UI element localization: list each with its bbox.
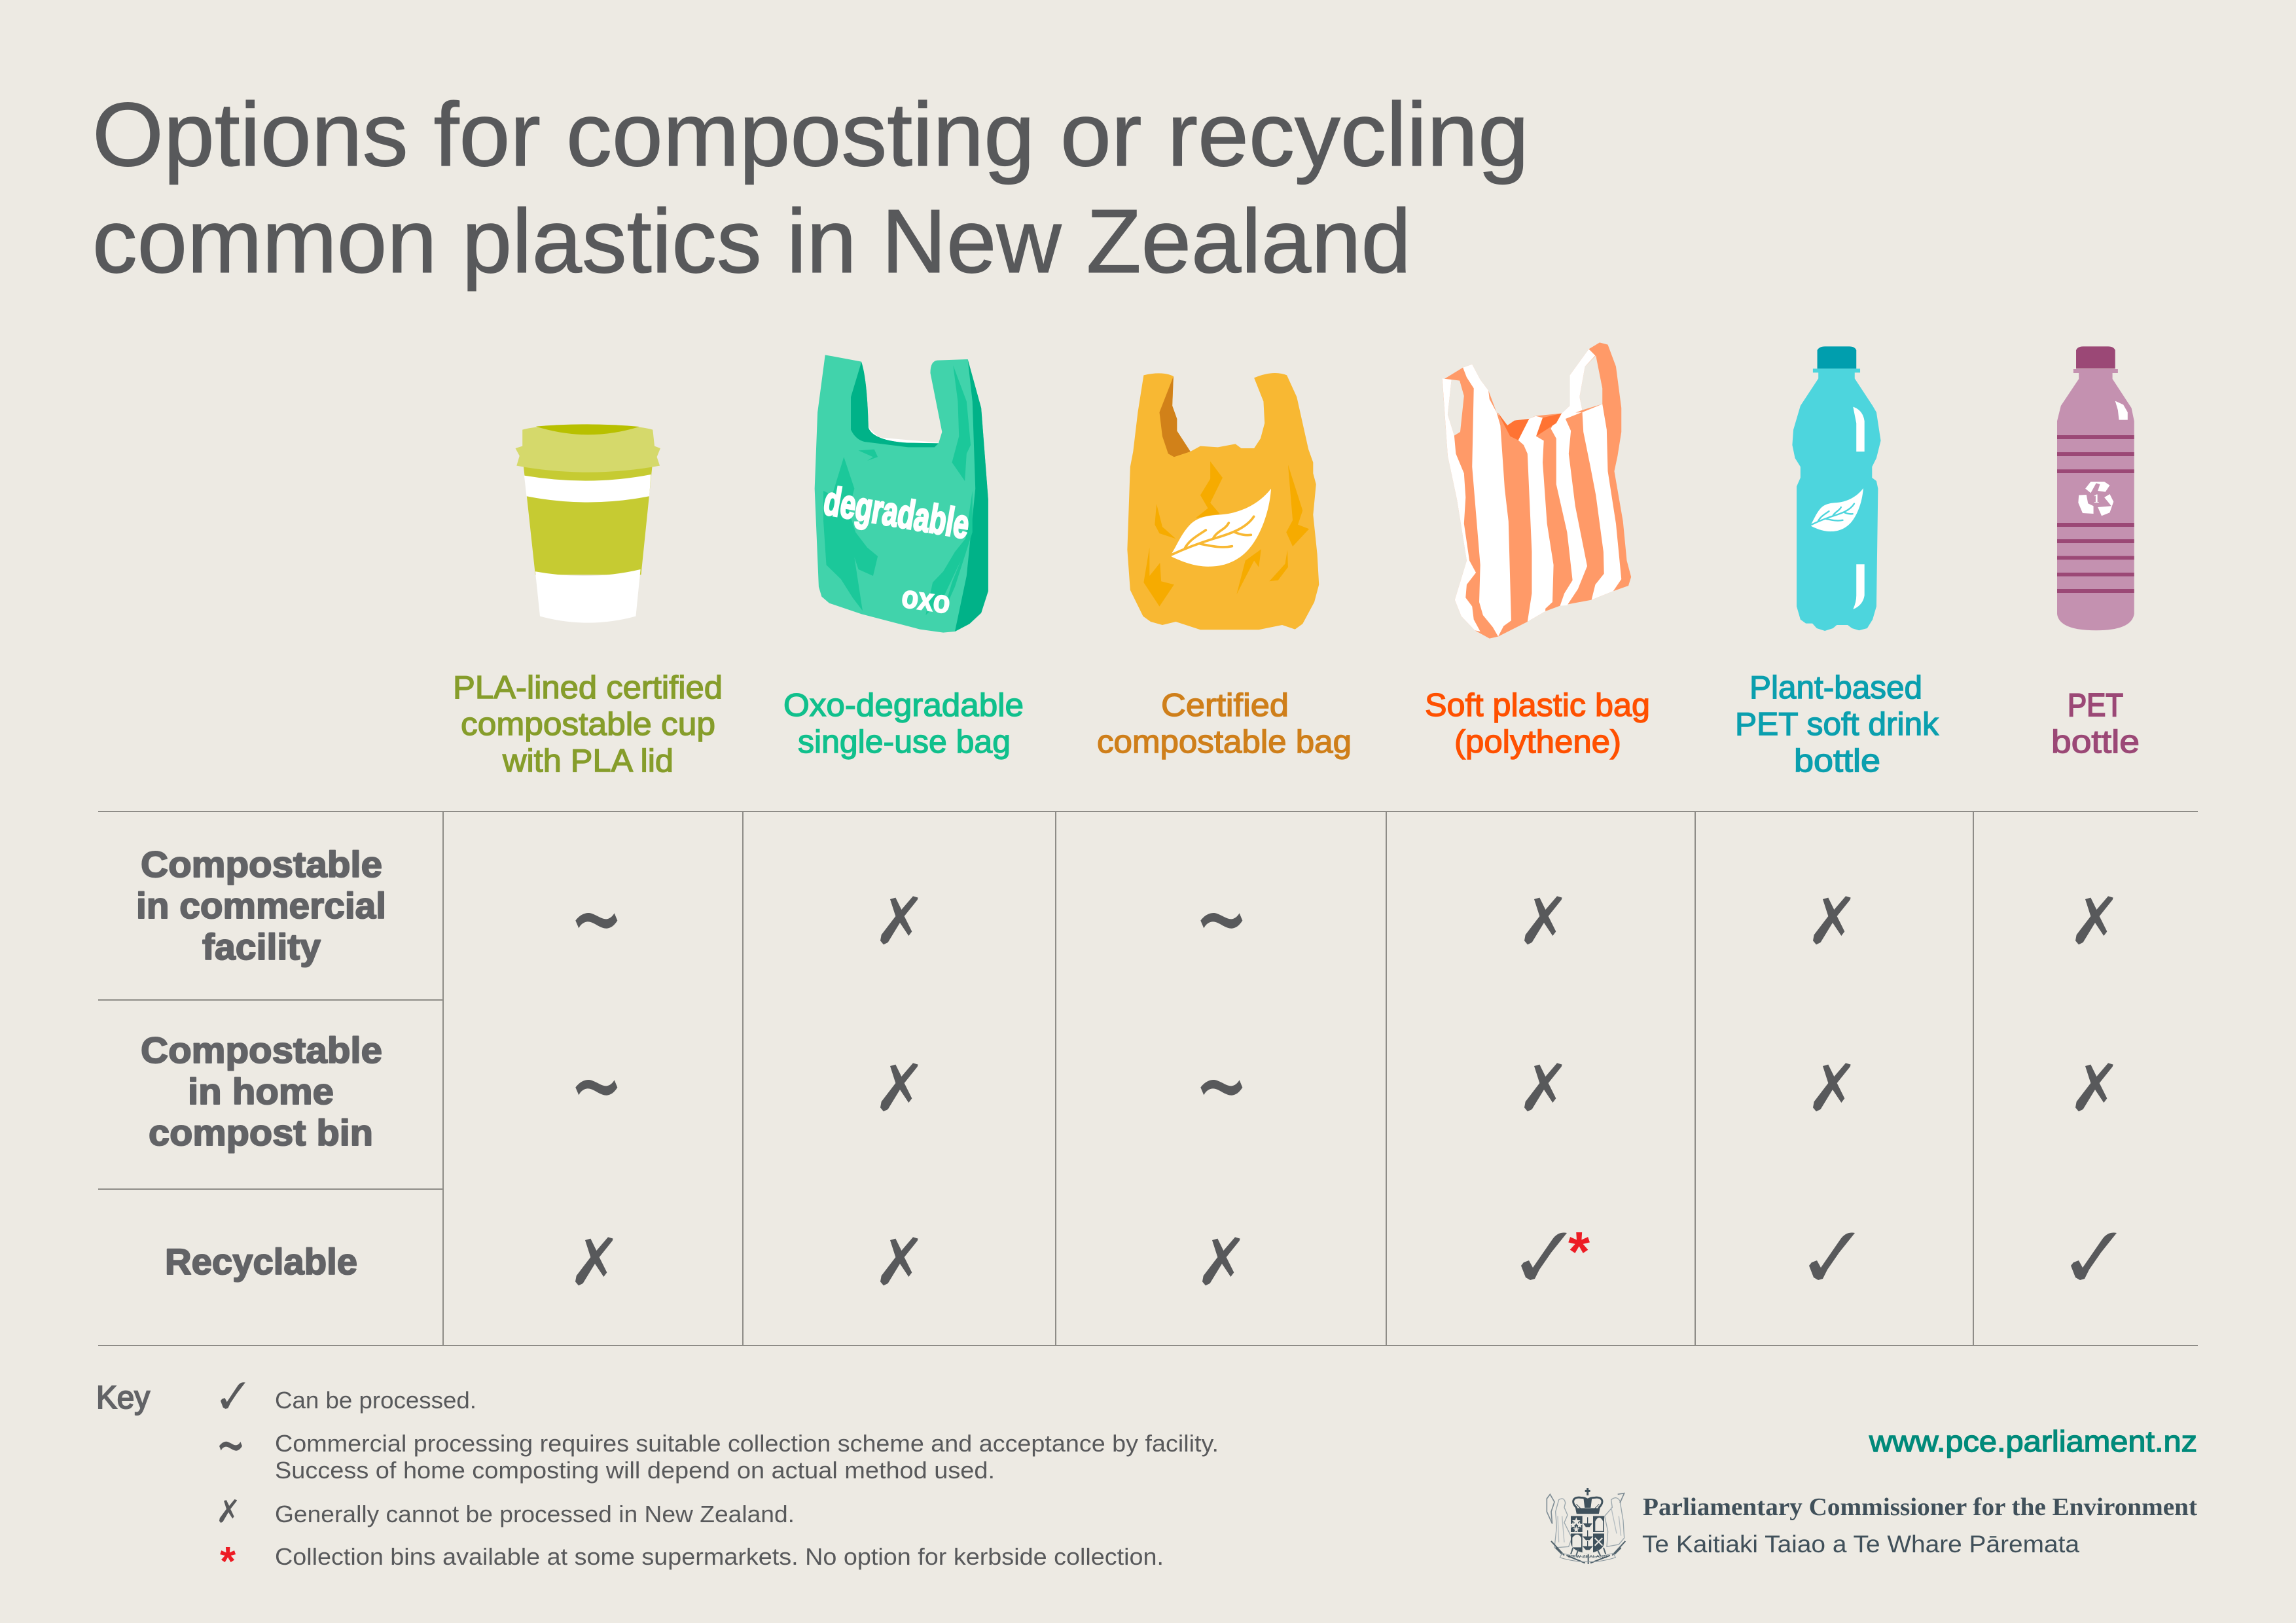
icon: certified compostable bag	[1127, 373, 1319, 630]
label: PET bottle: PET	[2068, 688, 2123, 723]
row heading: compostable in commercial facility: facility	[202, 926, 321, 967]
label: compostable bag: Certified	[1161, 688, 1289, 723]
table marks	[575, 896, 2117, 1285]
website: www.pce.parliament.nz	[1869, 1425, 2197, 1458]
label: cup: PLA-lined certified	[453, 670, 723, 705]
column labels	[453, 670, 2140, 779]
icon: New Zealand coat of arms: NEW ZEALAND	[1568, 1555, 1608, 1560]
label: cup	[453, 670, 723, 779]
icon: plant-based PET bottle	[1792, 346, 1881, 631]
label: soft plastic bag: Soft plastic bag	[1425, 688, 1650, 723]
row heading: compostable in commercial facility: Compostable	[141, 844, 382, 885]
label: soft plastic bag	[1425, 688, 1650, 760]
key icon: tilde	[219, 1442, 242, 1451]
icon: New Zealand coat of arms	[1547, 1488, 1625, 1564]
label: cup: compostable cup	[461, 707, 715, 742]
label: PET bottle	[2051, 688, 2140, 760]
label: oxo bag	[783, 688, 1024, 760]
key icon: asterisk: *	[220, 1539, 236, 1584]
title: common plastics in New Zealand	[92, 191, 1411, 292]
table grid	[98, 812, 2198, 1346]
title: Options for composting or recycling	[92, 84, 1529, 185]
key text: commercial processing: Commercial processing requires suitable collection scheme and acceptance by facility.	[275, 1430, 1219, 1457]
label: plant-based bottle: PET soft drink	[1735, 707, 1939, 742]
key text: can be processed: Can be processed.	[275, 1387, 476, 1414]
label: plant-based bottle: Plant-based	[1749, 670, 1922, 705]
icon: PET bottle	[2057, 346, 2134, 630]
icon: oxo-degradable bag	[815, 355, 988, 633]
label: plant-based bottle	[1735, 670, 1939, 779]
row heading: compostable in commercial facility: in commercial	[136, 885, 386, 926]
row heading: compostable in home compost bin: Compostable	[141, 1029, 382, 1071]
label: PET bottle: bottle	[2051, 724, 2140, 760]
label: oxo bag: single-use bag	[798, 724, 1011, 760]
key	[96, 1380, 1219, 1584]
label: soft plastic bag: (polythene)	[1454, 724, 1621, 760]
icon: compostable cup	[516, 424, 660, 623]
key text: collection bins: Collection bins available at some supermarkets. No option for kerbside collection.	[275, 1543, 1164, 1570]
label: compostable bag	[1097, 688, 1352, 760]
mark: row 2	[575, 1063, 2113, 1111]
organisation name	[1642, 1493, 2197, 1558]
mark: row 1	[575, 896, 2113, 944]
key icon: cross	[219, 1499, 237, 1523]
row heading: compostable in home compost bin: compost bin	[149, 1112, 373, 1153]
key text: generally cannot: Generally cannot be processed in New Zealand.	[275, 1501, 795, 1527]
row heading: compostable in home compost bin	[141, 1029, 382, 1153]
key text: commercial processing: Success of home composting will depend on actual method used.	[275, 1457, 995, 1484]
label: cup: with PLA lid	[502, 743, 673, 779]
label: oxo bag: Oxo-degradable	[783, 688, 1024, 723]
key icon: tick	[221, 1382, 245, 1409]
label: compostable bag: compostable bag	[1097, 724, 1352, 760]
icon: oxo-degradable bag: oxo	[899, 579, 952, 620]
icon: striped soft plastic bag	[1443, 342, 1631, 639]
mark: row 3	[575, 1221, 2117, 1285]
row heading: compostable in home compost bin: in home	[188, 1071, 334, 1112]
label: plant-based bottle: bottle	[1794, 743, 1880, 779]
key text: commercial processing	[275, 1430, 1219, 1484]
icon: oxo-degradable bag: degradable	[821, 478, 973, 548]
icon: leaf on bottle	[1811, 488, 1863, 531]
row heading: compostable in commercial facility	[136, 844, 386, 967]
organisation name: Te Kaitiaki Taiao a Te Whare Pāremata	[1642, 1531, 2079, 1558]
title	[92, 84, 1529, 292]
icon: leaf on compostable bag	[1172, 489, 1271, 567]
mark: row 3: *	[1568, 1221, 1590, 1283]
icon: PET bottle: 1	[2093, 492, 2100, 506]
organisation name: Parliamentary Commissioner for the Environment	[1643, 1493, 2197, 1521]
key heading: Key	[96, 1380, 150, 1416]
row heading: recyclable: Recyclable	[165, 1241, 357, 1282]
